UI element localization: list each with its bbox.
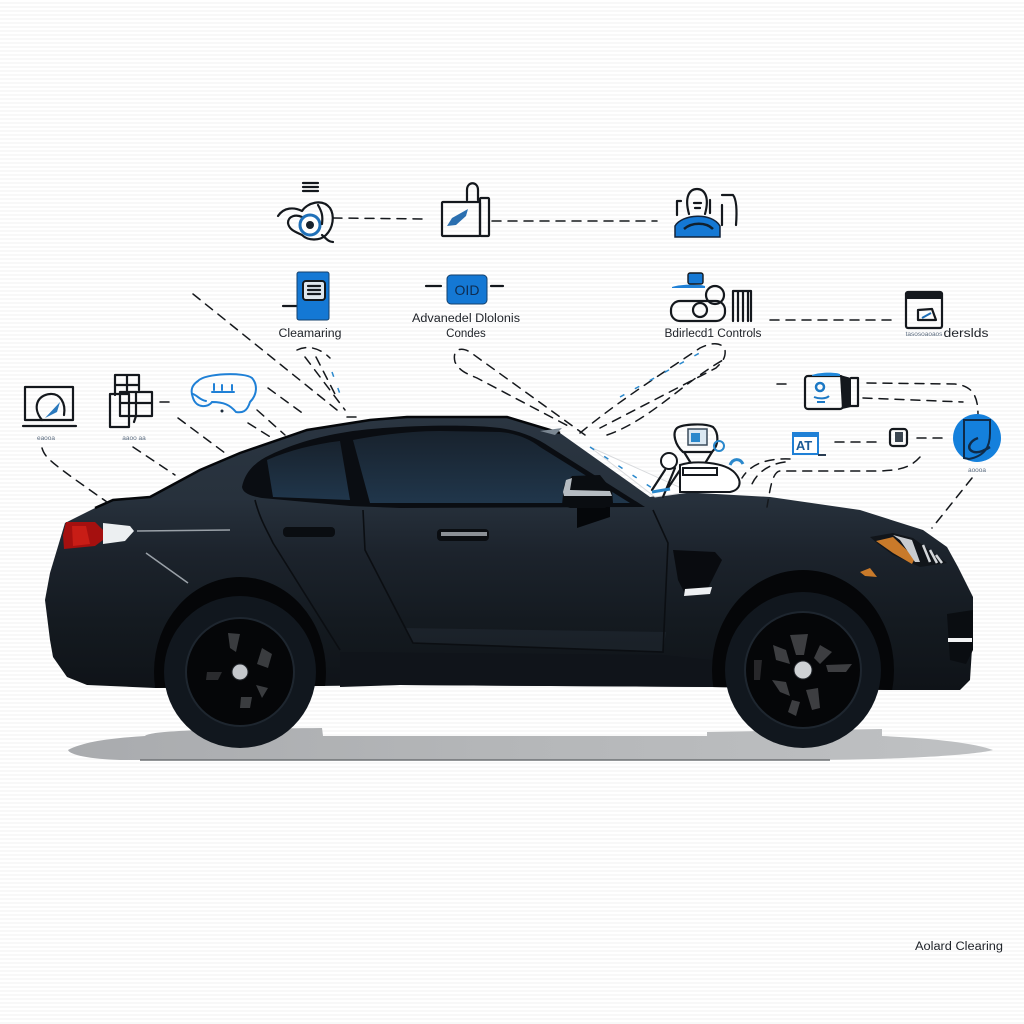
label: Advanced: Condes	[446, 328, 486, 340]
icon: blue shield circle	[953, 414, 1001, 462]
icon: lock	[442, 183, 489, 236]
connector lines	[42, 218, 978, 528]
rear wheel arch	[154, 577, 326, 688]
fender vent	[673, 550, 722, 596]
icon: blue AI card: AT	[796, 438, 812, 453]
side marker	[860, 568, 877, 577]
label: Advanced	[412, 313, 520, 340]
label: Bidirected Controls: Bdirlecd1 Controls	[664, 328, 762, 340]
ground shadow	[68, 728, 993, 760]
car body	[45, 417, 973, 690]
icon: capsule	[805, 373, 858, 409]
roof outline	[95, 417, 560, 508]
infographic canvas	[22, 182, 1002, 952]
icon: eye	[278, 183, 333, 242]
door lower sheen	[405, 628, 666, 652]
label: details: tasosoaoaos	[906, 331, 943, 338]
tail light	[63, 522, 134, 549]
icon: OID chip	[426, 275, 503, 304]
car	[45, 417, 973, 770]
icon: window gauge	[906, 292, 942, 328]
body highlight lines	[137, 530, 230, 583]
label: Cleamaring: Cleamaring	[278, 328, 342, 340]
lower sill	[340, 652, 712, 687]
front wheel	[725, 592, 881, 748]
icon: blue car outline	[192, 374, 256, 412]
rear side window	[267, 441, 350, 500]
window surround	[242, 426, 645, 508]
front grille	[947, 610, 973, 664]
rear door handle	[283, 527, 335, 537]
front door handle	[437, 529, 489, 541]
icon: blue AI card	[792, 433, 826, 455]
icon: bidirectional controls	[671, 273, 751, 321]
icon: phone	[890, 429, 907, 446]
front side window	[353, 431, 630, 503]
rear wheel	[164, 596, 316, 748]
icon: blue device	[283, 272, 329, 320]
label: Advanced: Advanedel Dlolonis	[412, 313, 520, 325]
icon: blocks	[110, 375, 152, 427]
small label: laptop: eaooa	[37, 435, 55, 442]
icon: laptop gauge	[23, 387, 76, 426]
small label: shield: aoooa	[968, 467, 986, 474]
small label: blocks: aaoo aa	[122, 435, 146, 442]
windshield highlight	[590, 447, 690, 497]
label: details: derslds	[944, 328, 989, 340]
side mirror	[562, 475, 613, 528]
icon: blue dome controls	[675, 189, 737, 237]
front wheel arch	[712, 570, 894, 690]
figure: robot on the hood	[652, 424, 743, 497]
door seams	[255, 500, 668, 652]
label: corner caption: Aolard Clearing	[915, 941, 1003, 953]
label: details	[906, 328, 989, 340]
icon: OID chip: OID	[455, 282, 479, 298]
headlight	[870, 533, 947, 567]
